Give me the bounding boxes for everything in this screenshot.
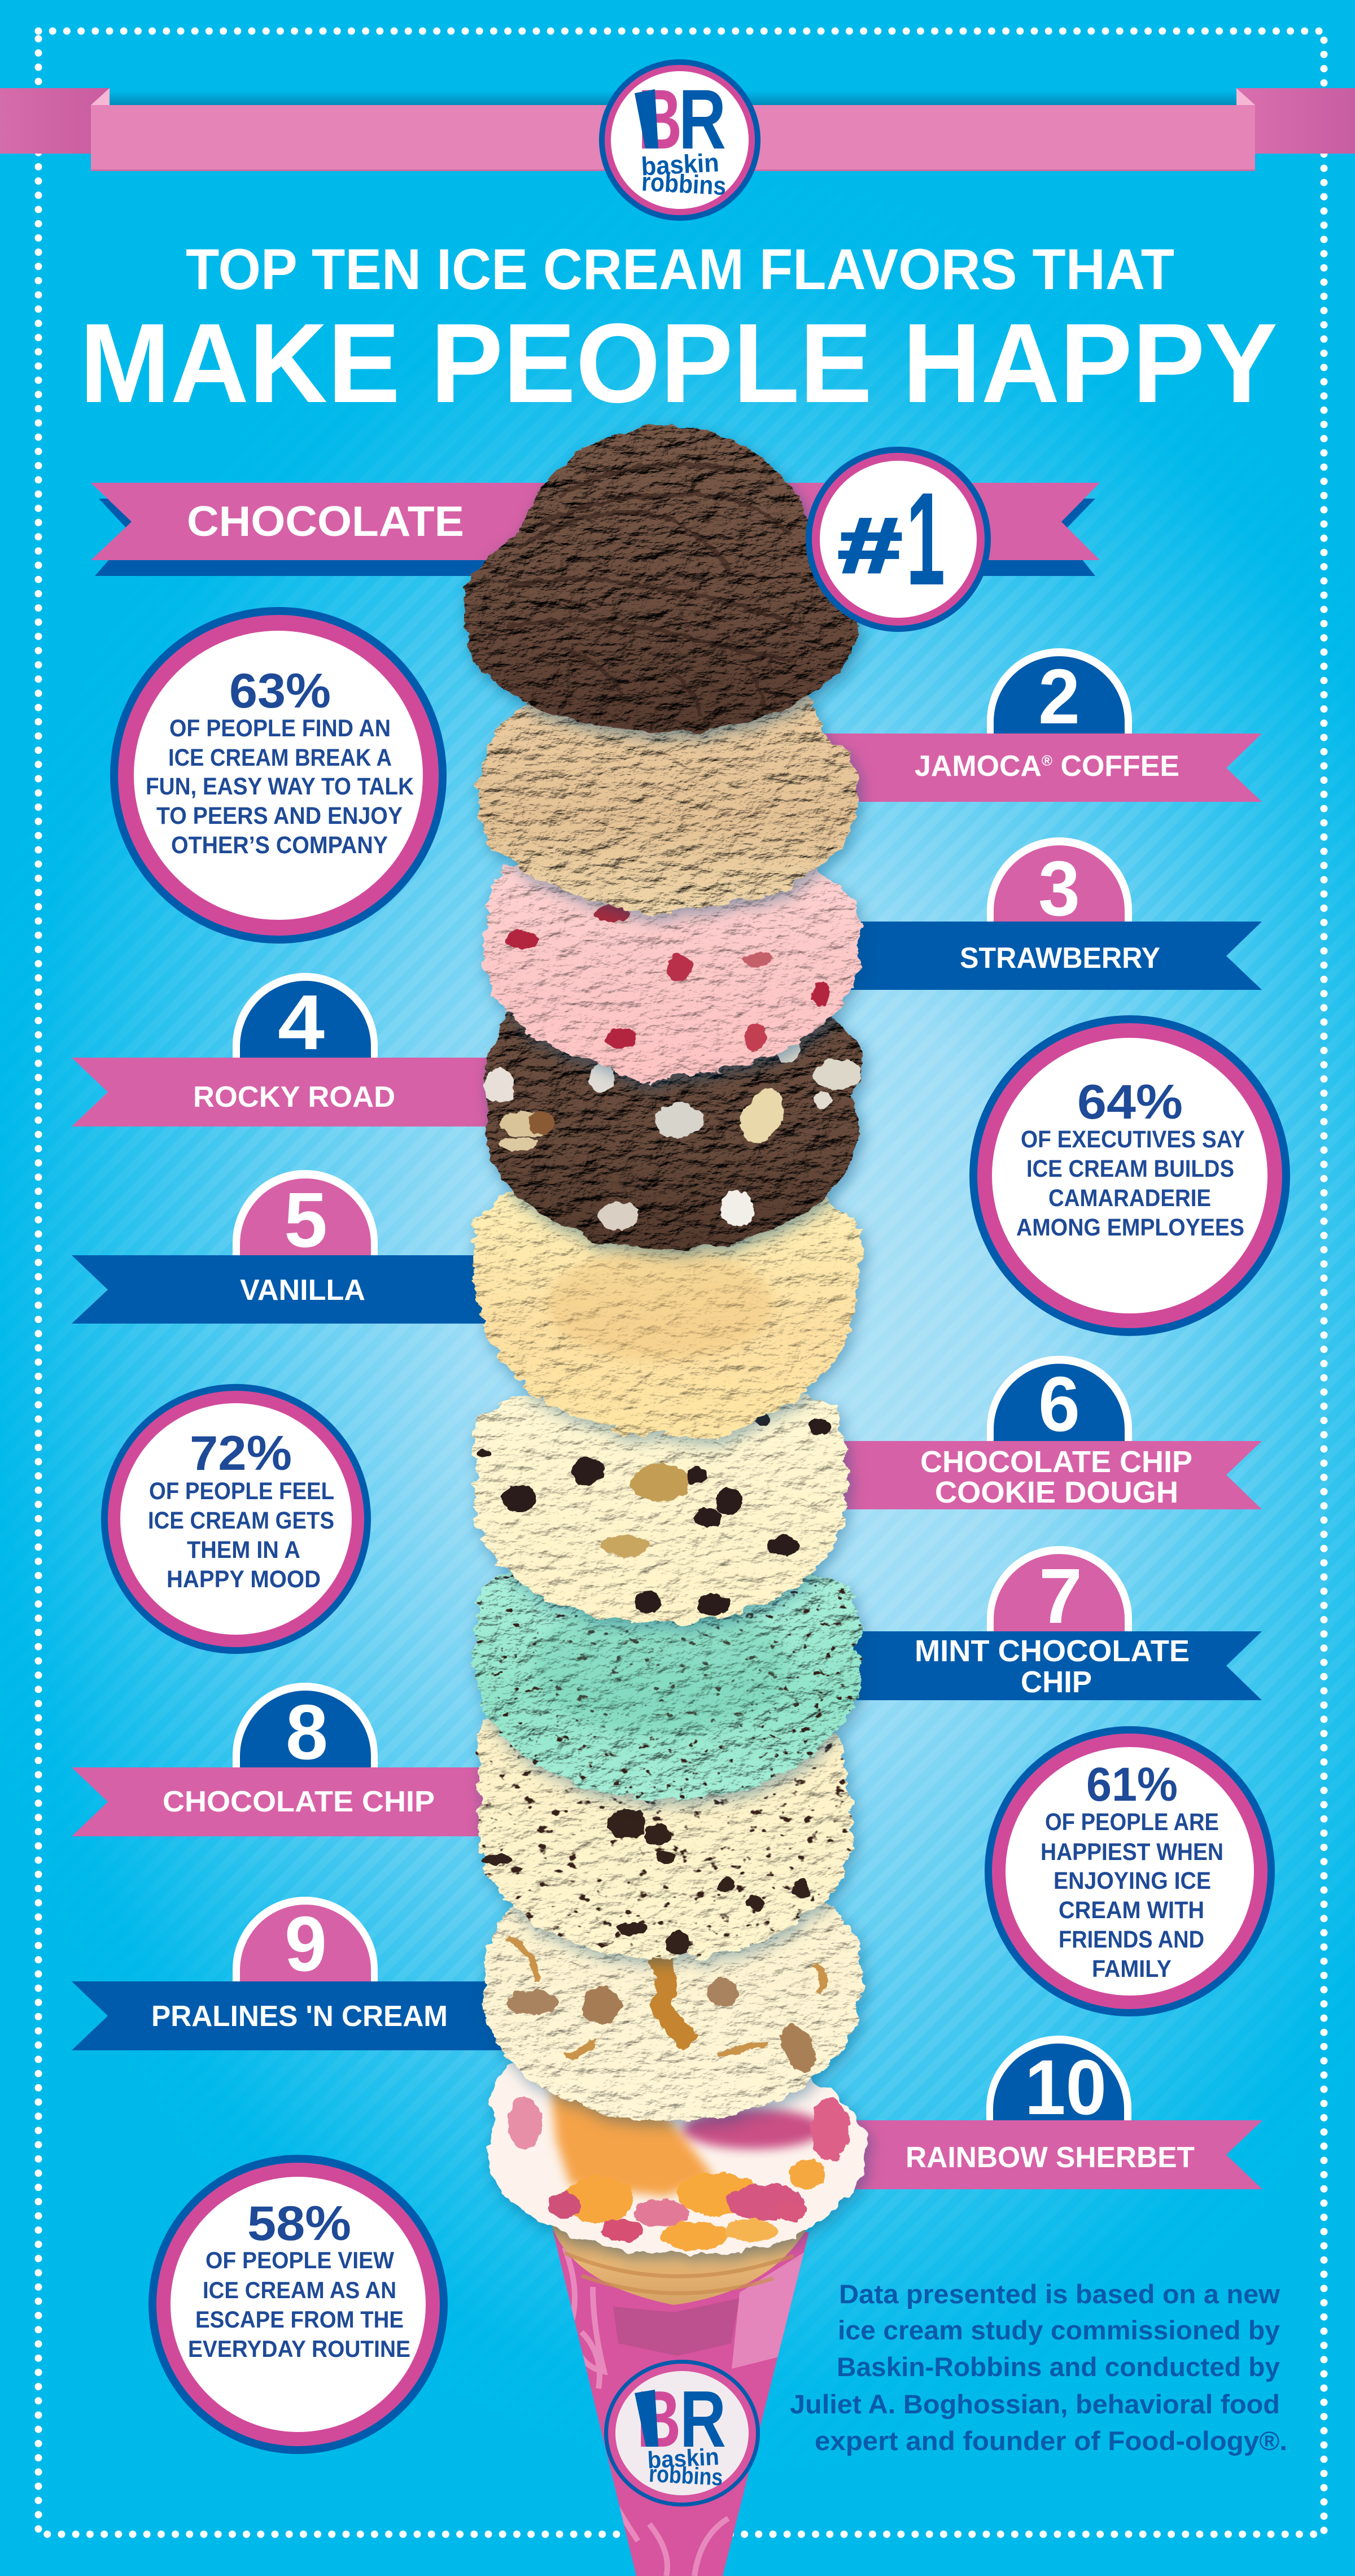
data source note xyxy=(790,2279,1287,2456)
stat circle: 64% xyxy=(969,1015,1290,1336)
stat circle: 58%: ESCAPE FROM THE xyxy=(195,2306,404,2333)
stat circle: 63% xyxy=(110,607,447,944)
stat circle: 63%: OTHER’S COMPANY xyxy=(171,832,388,859)
logo on cone: baskin xyxy=(647,2443,720,2473)
banner: #1 chocolate ribbon xyxy=(91,483,1100,576)
scoop: mint chocolate chip xyxy=(472,1544,864,1799)
ribbon 7: mint chocolate chip: MINT CHOCOLATE xyxy=(915,1634,1190,1668)
stat circle: 64%: ICE CREAM BUILDS xyxy=(1026,1155,1234,1182)
ribbon 6: chocolate chip cookie dough: CHOCOLATE CHIP xyxy=(920,1445,1192,1479)
ice cream cone xyxy=(553,2230,809,2576)
stat circle: 61%: HAPPIEST WHEN xyxy=(1041,1839,1223,1866)
stat circle: 72%: OF PEOPLE FEEL xyxy=(149,1478,334,1505)
logo: Baskin Robbins top: B xyxy=(638,72,682,167)
stat circle: 61%: FAMILY xyxy=(1092,1955,1172,1983)
data source note: ice cream study commissioned by xyxy=(838,2315,1280,2345)
stat circle: 58%: OF PEOPLE VIEW xyxy=(206,2247,394,2273)
ribbon 4: rocky road: ROCKY ROAD xyxy=(193,1081,395,1114)
ribbon 9: pralines n cream: PRALINES 'N CREAM xyxy=(151,2000,448,2033)
ribbon 3: strawberry xyxy=(790,837,1262,990)
title: MAKE PEOPLE HAPPY xyxy=(80,300,1278,426)
#1 badge: 1 xyxy=(906,465,945,613)
stat circle: 58%: EVERYDAY ROUTINE xyxy=(188,2335,410,2362)
stat circle: 63%: 63% xyxy=(229,664,331,718)
title xyxy=(80,237,1278,426)
scoop: pralines n cream xyxy=(484,1878,860,2121)
stat circle: 63%: FUN, EASY WAY TO TALK xyxy=(146,773,414,800)
ribbon 3: strawberry: STRAWBERRY xyxy=(960,942,1160,975)
ribbon 5: vanilla xyxy=(72,1170,565,1324)
logo: Baskin Robbins top xyxy=(599,59,760,221)
scoop: strawberry xyxy=(483,836,862,1085)
logo: Baskin Robbins top: baskin xyxy=(640,147,720,181)
stat circle: 58%: 58% xyxy=(247,2197,351,2251)
ribbon 6: chocolate chip cookie dough: COOKIE DOUGH xyxy=(935,1475,1178,1509)
data source note: expert and founder of Food-ology®. xyxy=(815,2426,1287,2456)
ribbon 8: chocolate chip: 8 xyxy=(286,1689,328,1776)
title: TOP TEN ICE CREAM FLAVORS THAT xyxy=(186,237,1174,302)
logo: Baskin Robbins top: R xyxy=(679,72,726,167)
banner: #1 chocolate ribbon: CHOCOLATE xyxy=(187,497,464,545)
ribbon 2: Jamoca coffee: JAMOCA xyxy=(915,750,1042,783)
#1 badge xyxy=(806,447,991,632)
ribbon 2: Jamoca coffee: COFFEE xyxy=(1052,750,1179,783)
scoop: jamoca coffee xyxy=(477,678,859,915)
ribbon 2: Jamoca coffee: ® xyxy=(1042,752,1052,769)
ribbon 9: pralines n cream xyxy=(72,1897,565,2050)
stat circle: 61% xyxy=(985,1726,1275,2016)
stat circle: 63%: TO PEERS AND ENJOY xyxy=(156,802,403,829)
data source note: Data presented is based on a new xyxy=(839,2279,1280,2309)
scoop: vanilla xyxy=(475,1163,862,1441)
ribbon 9: pralines n cream: 9 xyxy=(285,1901,327,1988)
stat circle: 58% xyxy=(148,2155,448,2454)
stat circle: 64%: 64% xyxy=(1077,1075,1183,1129)
ribbon 7: mint chocolate chip: CHIP xyxy=(1021,1665,1092,1699)
ribbon 6: chocolate chip cookie dough xyxy=(790,1356,1262,1509)
ribbon 5: vanilla: VANILLA xyxy=(240,1274,365,1307)
stat circle: 61%: ENJOYING ICE xyxy=(1054,1867,1211,1894)
scoop: chocolate chip cookie dough xyxy=(472,1378,849,1626)
stat circle: 61%: CREAM WITH xyxy=(1059,1897,1204,1924)
stat circle: 61%: OF PEOPLE ARE xyxy=(1045,1809,1219,1836)
logo: Baskin Robbins top: robbins xyxy=(641,167,727,200)
ribbon 8: chocolate chip: CHOCOLATE CHIP xyxy=(163,1785,435,1818)
stat circle: 64%: OF EXECUTIVES SAY xyxy=(1021,1126,1245,1153)
ribbon 6: chocolate chip cookie dough: 6 xyxy=(1038,1361,1080,1448)
data source note: Baskin-Robbins and conducted by xyxy=(837,2352,1280,2382)
stat circle: 72%: THEM IN A xyxy=(187,1536,300,1564)
scoop: rocky road xyxy=(484,988,862,1249)
top ribbon banner xyxy=(0,88,1355,171)
ribbon 4: rocky road xyxy=(72,973,565,1127)
data source note: Juliet A. Boghossian, behavioral food xyxy=(790,2389,1280,2419)
#1 badge: # xyxy=(837,503,900,589)
scoop: rainbow sherbet xyxy=(488,2050,867,2255)
ribbon 8: chocolate chip xyxy=(72,1683,565,1836)
wafer cone xyxy=(550,2222,811,2305)
stat circle: 63%: ICE CREAM BREAK A xyxy=(168,744,392,771)
stat circle: 72%: HAPPY MOOD xyxy=(167,1566,321,1593)
ribbon 5: vanilla: 5 xyxy=(284,1177,327,1264)
ribbon 10: rainbow sherbet: RAINBOW SHERBET xyxy=(906,2141,1195,2174)
stat circle: 64%: AMONG EMPLOYEES xyxy=(1016,1214,1244,1241)
stat circle: 58%: ICE CREAM AS AN xyxy=(203,2277,396,2303)
scoop: chocolate xyxy=(463,426,859,731)
ribbon 2: Jamoca coffee: 2 xyxy=(1038,653,1080,740)
stat circle: 61%: 61% xyxy=(1086,1758,1178,1811)
stat circle: 72%: ICE CREAM GETS xyxy=(148,1507,334,1534)
logo on cone xyxy=(604,2360,760,2507)
ribbon 3: strawberry: 3 xyxy=(1038,845,1080,932)
ribbon 4: rocky road: 4 xyxy=(278,979,325,1066)
ribbon 2: Jamoca coffee xyxy=(790,648,1262,802)
logo on cone: R xyxy=(680,2374,726,2464)
stat circle: 64%: CAMARADERIE xyxy=(1048,1185,1211,1212)
ribbon 10: rainbow sherbet xyxy=(790,2036,1262,2189)
stat circle: 72%: 72% xyxy=(190,1426,292,1481)
logo on cone: B xyxy=(637,2374,681,2464)
stat circle: 63%: OF PEOPLE FIND AN xyxy=(169,715,391,742)
stat circle: 61%: FRIENDS AND xyxy=(1059,1926,1204,1953)
ribbon 7: mint chocolate chip xyxy=(790,1546,1262,1700)
ribbon 7: mint chocolate chip: 7 xyxy=(1039,1553,1082,1640)
stat circle: 72% xyxy=(101,1384,371,1654)
ribbon 10: rainbow sherbet: 10 xyxy=(1025,2044,1107,2131)
logo on cone: robbins xyxy=(648,2460,723,2491)
scoop: chocolate chip xyxy=(478,1712,852,1958)
